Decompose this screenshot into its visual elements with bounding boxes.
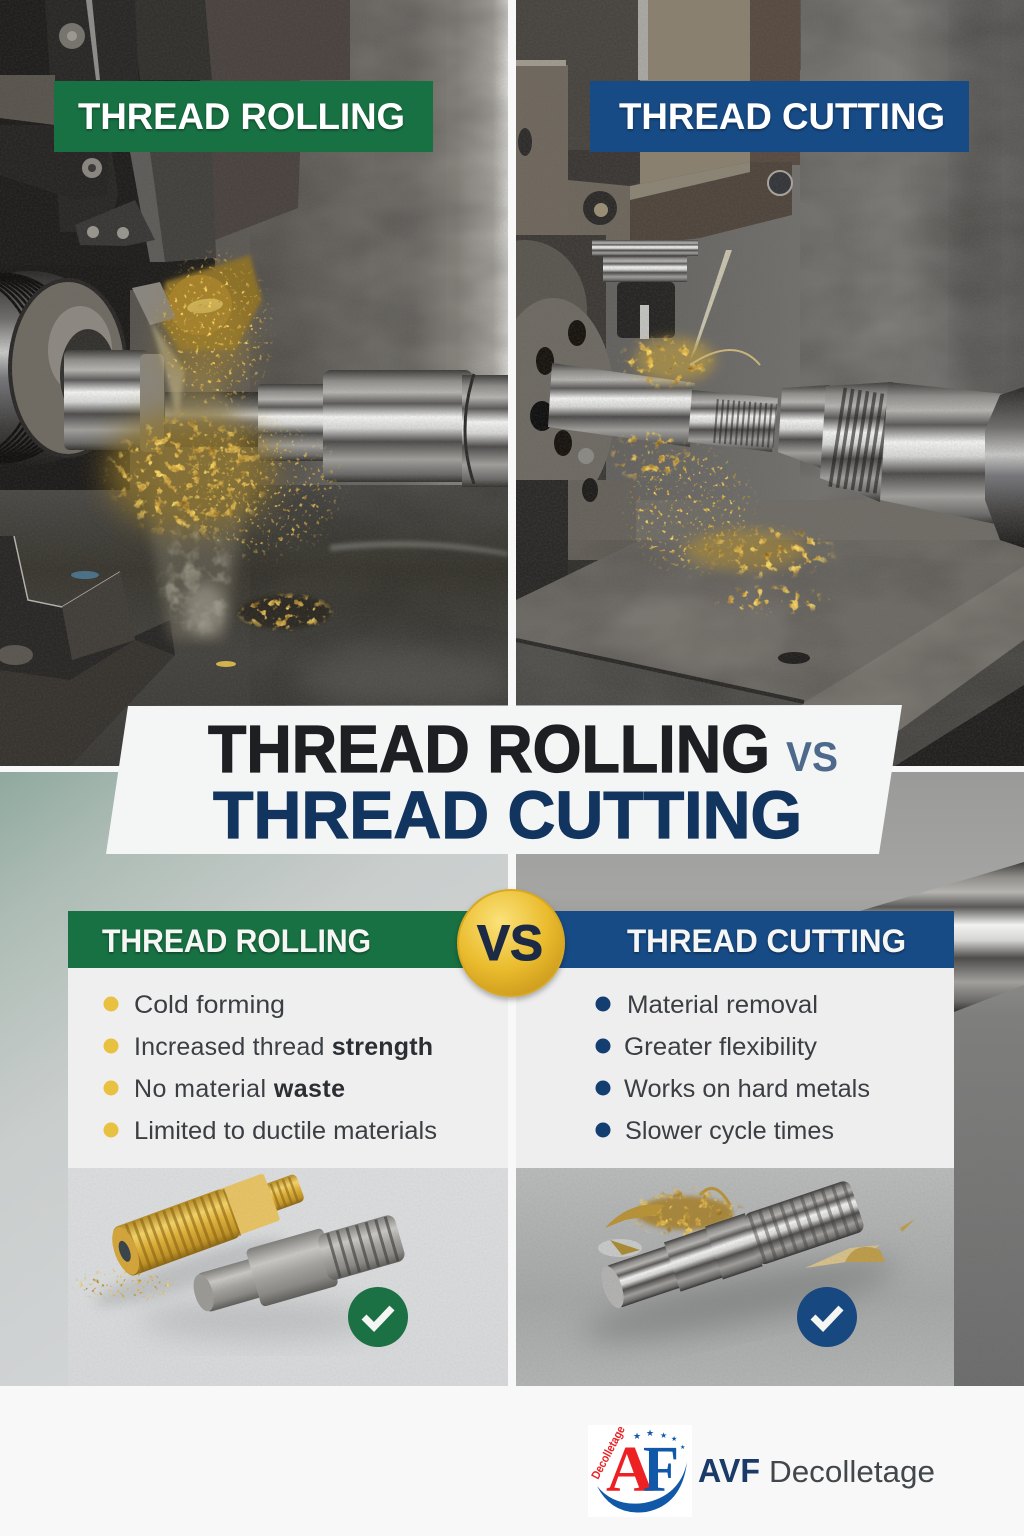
list body: Limited to ductile materials [134, 1117, 437, 1145]
label: thread rolling [54, 81, 433, 152]
list body: Greater flexibility [624, 1033, 818, 1061]
machine head block [0, 0, 350, 290]
list body: Slower cycle times [625, 1117, 834, 1145]
workpiece shaft [64, 350, 508, 487]
list body [68, 968, 508, 1168]
block and coolant splash [0, 320, 250, 766]
spindle and cutter [592, 240, 732, 360]
brand name: AVF [698, 1452, 760, 1489]
heading: thread cutting [545, 911, 954, 968]
gold chips spray [102, 245, 350, 667]
panel: thread rolling list [68, 911, 508, 1168]
gold shavings [598, 1185, 915, 1268]
gold chips [608, 334, 840, 616]
photo: thread cutting machine [463, 0, 1024, 766]
VS badge: VS [477, 915, 543, 971]
VS badge [458, 890, 564, 996]
flange [516, 235, 636, 600]
logo: AVF: ★ [680, 1444, 685, 1451]
tool holder block [516, 0, 801, 246]
panel: lower left background [0, 772, 508, 1386]
list body: Increased thread strength [134, 1033, 433, 1061]
label: thread cutting: THREAD CUTTING [619, 96, 945, 137]
threaded chuck [0, 265, 130, 490]
title banner: THREAD ROLLING [208, 712, 770, 787]
list body: Cold forming [134, 991, 285, 1019]
logo: AVF: ★ [671, 1435, 677, 1443]
heading: thread rolling: THREAD ROLLING [102, 923, 371, 959]
heading: thread rolling [68, 911, 478, 968]
logo: AVF: F [643, 1433, 679, 1506]
logo: AVF: ★ [660, 1431, 667, 1440]
logo: AVF: ★ [646, 1428, 654, 1438]
heading: thread cutting: THREAD CUTTING [627, 923, 906, 959]
logo: AVF: ★ [633, 1431, 641, 1441]
logo: AVF [588, 1423, 692, 1517]
photo: rolled brass and steel parts [68, 1168, 404, 1356]
list body [516, 968, 954, 1168]
title banner: THREAD CUTTING [213, 778, 802, 853]
angled workpiece [548, 363, 1024, 548]
logo: AVF: A [606, 1433, 654, 1506]
title banner: VS [786, 733, 838, 780]
title banner [106, 705, 902, 854]
threaded steel part [602, 1181, 864, 1308]
brand name [698, 1452, 935, 1489]
logo: AVF: Decolletage [588, 1423, 628, 1481]
photo: thread rolling machine [0, 0, 520, 766]
brass part [112, 1174, 304, 1276]
label: thread rolling: THREAD ROLLING [78, 96, 405, 137]
panel: lower right background [516, 772, 1024, 1386]
check icon: blue [797, 1287, 857, 1347]
steel plate [516, 540, 1024, 766]
list body: No material waste [134, 1075, 345, 1103]
golden forming roll [132, 255, 262, 350]
photo: cut steel part [516, 1168, 954, 1386]
steel part [194, 1215, 404, 1312]
label: thread cutting [590, 81, 969, 152]
list body: Works on hard metals [624, 1075, 870, 1103]
list body: Material removal [627, 991, 818, 1019]
brand name: Decolletage [769, 1454, 935, 1489]
panel: thread cutting list [516, 911, 954, 1168]
check icon: green [348, 1287, 408, 1347]
